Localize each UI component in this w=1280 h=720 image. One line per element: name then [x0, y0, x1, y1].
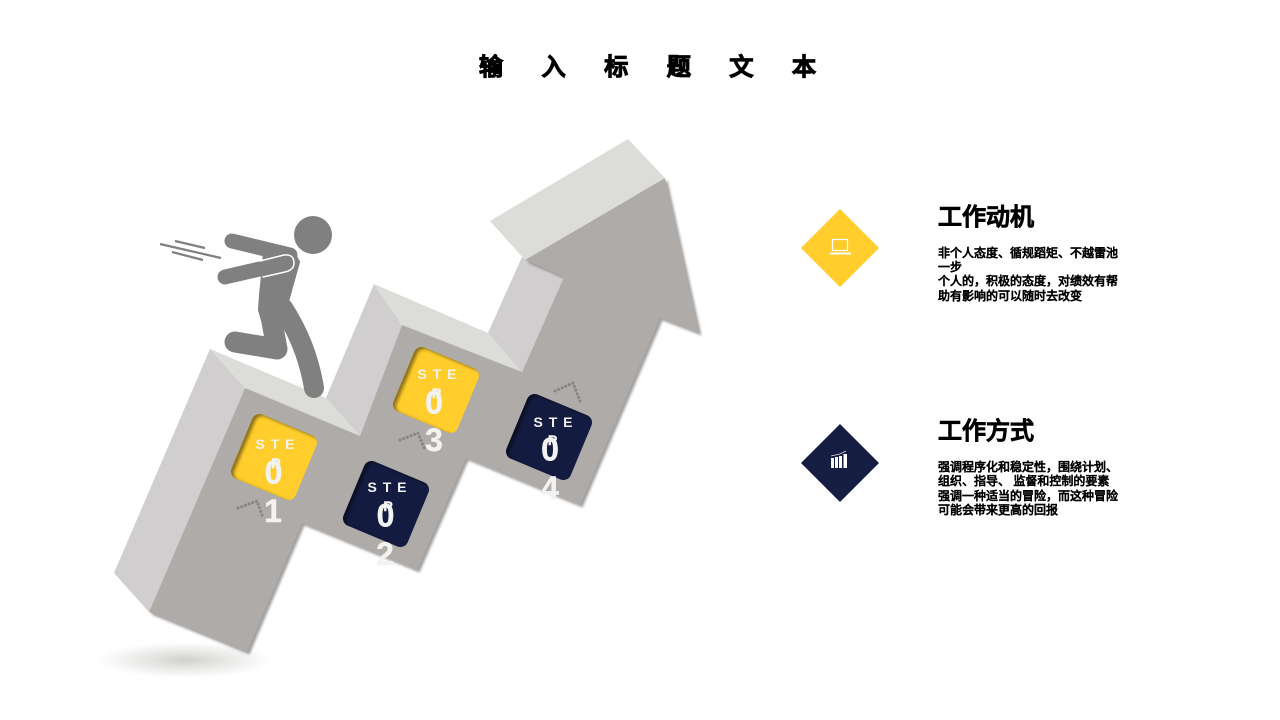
step 03 tile	[401, 355, 471, 425]
front leg	[283, 308, 314, 388]
arrow side face: upper block	[488, 257, 564, 372]
step 01 dotted marker	[238, 501, 263, 518]
step 04 number: 4	[541, 470, 559, 506]
body text: work method: 组织、指导、 监督和控制的要素	[938, 473, 1109, 488]
back arm	[232, 241, 290, 255]
icon: navy diamond with bar chart	[801, 424, 879, 502]
step 04 number: 0	[541, 432, 559, 468]
panel: work motivation	[801, 204, 1121, 303]
body text: work motivation: 助有影响的可以随时去改变	[938, 288, 1082, 303]
body text: work motivation: 个人的，积极的态度，对绩效有帮	[937, 273, 1118, 288]
step 02 number: 0	[377, 498, 394, 534]
body text: work method: 强调一种适当的冒险，而这种冒险	[938, 488, 1119, 503]
step 01 number: P	[271, 455, 281, 471]
arrow front face	[149, 178, 699, 652]
torso	[260, 250, 298, 338]
arrow top face: middle block	[374, 284, 522, 372]
front arm	[225, 255, 294, 277]
heading: work method: 工作方式	[938, 417, 1034, 445]
step 03 dotted marker	[400, 433, 425, 450]
arrow top face: lower block	[210, 349, 360, 436]
icon: yellow diamond with laptop	[801, 209, 879, 287]
speed lines	[160, 241, 221, 260]
step 03 number: 3	[425, 422, 443, 458]
step 02	[351, 469, 421, 572]
step 03 number: P	[432, 385, 441, 401]
step 02 label: S T E	[367, 479, 408, 495]
body text: work motivation: 非个人态度、循规蹈矩、不越雷池	[938, 245, 1118, 260]
body text: work motivation: 一步	[938, 259, 962, 274]
step 04 label: S T E	[533, 414, 574, 430]
heading: work motivation: 工作动机	[938, 204, 1034, 231]
step 01 number: 1	[264, 493, 282, 529]
step 03	[400, 355, 471, 458]
step 04 number: P	[548, 432, 557, 448]
step 01 tile	[239, 422, 309, 492]
body text: work method: 可能会带来更高的回报	[938, 502, 1058, 517]
arrow side face: lower block	[114, 349, 245, 612]
step 01 label: S T E	[255, 436, 296, 452]
ground shadow	[97, 642, 273, 678]
rear leg	[235, 322, 277, 349]
step 03 label: S T E	[417, 366, 458, 382]
body text: work method: 强调程序化和稳定性，围绕计划、	[938, 459, 1118, 474]
step 01	[238, 422, 309, 529]
running figure	[160, 216, 332, 388]
step 02 number: 2	[376, 536, 394, 572]
step 04	[514, 383, 584, 506]
panel: work method	[801, 417, 1121, 517]
arrow head top face	[490, 139, 665, 260]
step 04 dotted marker	[555, 383, 580, 401]
step 02 tile	[351, 469, 421, 539]
step 03 number: 0	[425, 384, 443, 420]
head	[294, 216, 332, 254]
title: 输入标题文本	[479, 53, 855, 81]
stepped arrow	[114, 139, 699, 652]
step 01 number: 0	[265, 454, 282, 490]
step 02 number: P	[383, 498, 393, 514]
step 04 tile	[514, 402, 584, 472]
arrow side face: middle block	[326, 284, 402, 436]
